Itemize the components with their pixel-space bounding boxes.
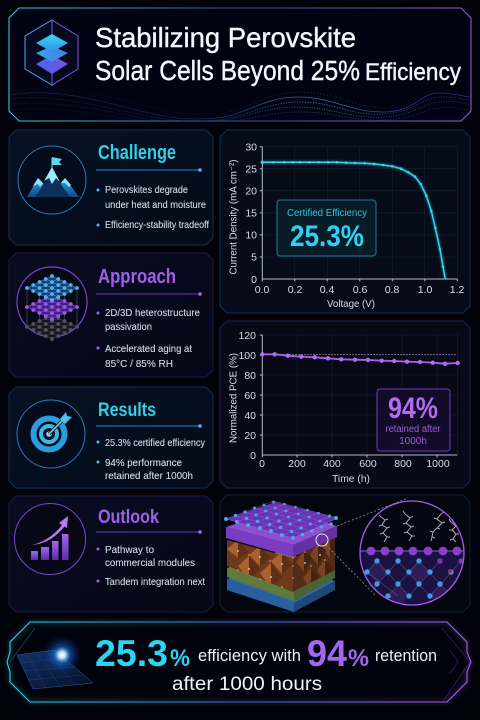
callout: retained: 1000h bbox=[399, 436, 427, 447]
organic ligand chains bbox=[379, 511, 459, 542]
bullets: 25.3% certified efficiency bbox=[105, 437, 206, 449]
title bbox=[95, 22, 461, 86]
axis labels: 80 bbox=[244, 370, 256, 382]
zoom marker and leader lines bbox=[316, 498, 408, 595]
blue substrate layer bbox=[227, 561, 335, 612]
top lattice layer bbox=[224, 501, 338, 540]
callout: certified efficiency: 25.3% bbox=[290, 220, 364, 253]
axis labels: 0.8 bbox=[385, 284, 399, 296]
title: Solar Cells Beyond 25% bbox=[95, 55, 360, 86]
icon: target with arrow bbox=[17, 400, 85, 468]
key takeaway text: efficiency with bbox=[198, 646, 301, 665]
axis labels: 15 bbox=[245, 208, 257, 220]
reference line at 100% bbox=[262, 354, 457, 356]
axis labels: 60 bbox=[244, 390, 256, 402]
footer banner bbox=[7, 622, 471, 703]
axis labels: 0 bbox=[250, 450, 256, 462]
axis labels: 0.6 bbox=[353, 284, 367, 296]
bullets bbox=[96, 437, 206, 482]
bullets bbox=[96, 544, 205, 588]
key takeaway text: 94 bbox=[307, 633, 347, 674]
header banner bbox=[9, 8, 471, 123]
plot grid bbox=[262, 335, 457, 455]
callout: certified efficiency: Certified Efficiency bbox=[287, 207, 368, 219]
axis labels: Current Density (mA cm⁻²) bbox=[228, 160, 240, 274]
axis labels: 1.0 bbox=[418, 284, 432, 296]
axis labels: 1000 bbox=[426, 458, 450, 470]
axis labels: 20 bbox=[244, 430, 256, 442]
panel: device structure bbox=[220, 495, 470, 612]
axis labels: 200 bbox=[288, 458, 306, 470]
purple slab bbox=[226, 510, 337, 557]
divider rule bbox=[96, 292, 202, 296]
axis labels: 120 bbox=[238, 330, 256, 342]
axis labels: 800 bbox=[394, 458, 412, 470]
icon: solar panel with sunburst bbox=[17, 635, 93, 689]
icon: mountain with flag bbox=[18, 146, 86, 214]
panel: J-V chart bbox=[220, 130, 470, 313]
axis labels: 25 bbox=[245, 164, 257, 176]
olive layer bbox=[227, 551, 335, 601]
divider rule bbox=[96, 530, 202, 534]
divider rule bbox=[96, 168, 202, 172]
bullets: Accelerated aging at bbox=[105, 343, 192, 355]
axis labels: 5 bbox=[251, 252, 257, 264]
key takeaway text: retention bbox=[375, 646, 437, 665]
bullets: retained after 1000h bbox=[105, 470, 193, 482]
bullets: commercial modules bbox=[105, 557, 195, 569]
heading: Results bbox=[98, 400, 156, 421]
axis labels: 400 bbox=[323, 458, 341, 470]
panel: retention chart bbox=[220, 321, 470, 488]
heading: Challenge bbox=[98, 142, 176, 164]
axis labels: Time (h) bbox=[332, 473, 370, 485]
icon: growth bars with arrow bbox=[14, 504, 86, 574]
panel: outlook bbox=[9, 496, 213, 612]
axis labels: 1.2 bbox=[450, 284, 464, 296]
bullets: Tandem integration next bbox=[105, 576, 205, 588]
bullets: under heat and moisture bbox=[105, 199, 206, 211]
axes bbox=[260, 147, 457, 282]
bullets: Efficiency-stability tradeoff bbox=[105, 219, 209, 231]
axis labels: 100 bbox=[238, 350, 256, 362]
key takeaway text: % bbox=[170, 645, 190, 672]
decorative dotted wave bbox=[10, 88, 470, 123]
perovskite layer bbox=[227, 536, 338, 592]
bullets: 85°C / 85% RH bbox=[105, 358, 173, 370]
bullets: 2D/3D heterostructure bbox=[105, 307, 200, 319]
axis labels: Normalized PCE (%) bbox=[228, 353, 240, 443]
callout: retained: retained after bbox=[386, 424, 441, 435]
axis labels: 0.4 bbox=[320, 284, 334, 296]
panel: results bbox=[9, 387, 213, 488]
axis labels: Voltage (V) bbox=[327, 298, 375, 310]
axes bbox=[260, 335, 457, 458]
title: Efficiency bbox=[365, 59, 461, 86]
axis labels: 40 bbox=[244, 410, 256, 422]
bullets: passivation bbox=[105, 321, 152, 333]
plot grid bbox=[262, 147, 457, 279]
magnified interface circle bbox=[360, 501, 465, 611]
heading: Approach bbox=[98, 266, 176, 288]
icon: stacked layers in hexagon bbox=[25, 20, 78, 85]
layer stack bbox=[224, 501, 338, 612]
axis labels: 600 bbox=[359, 458, 377, 470]
axis labels: 0 bbox=[259, 458, 265, 470]
bullets: Perovskites degrade bbox=[105, 184, 188, 196]
axis labels: 0 bbox=[251, 274, 257, 286]
key takeaway text bbox=[95, 633, 437, 695]
key takeaway text: 25.3 bbox=[95, 633, 168, 674]
axis labels bbox=[228, 330, 450, 485]
title: Stabilizing Perovskite bbox=[95, 22, 356, 53]
panel: challenge bbox=[9, 130, 213, 245]
bullets: Pathway to bbox=[105, 544, 154, 556]
callout: retained bbox=[377, 389, 450, 451]
divider rule bbox=[96, 424, 202, 428]
bullets bbox=[96, 307, 200, 370]
icon: lattice layers bbox=[17, 267, 87, 341]
key takeaway text: after 1000 hours bbox=[172, 674, 322, 695]
axis labels: 0.0 bbox=[255, 284, 269, 296]
bullets: 94% performance bbox=[105, 457, 182, 469]
axis labels: 30 bbox=[245, 142, 257, 154]
axis labels: 20 bbox=[245, 186, 257, 198]
callout: certified efficiency bbox=[277, 200, 376, 256]
key takeaway text: % bbox=[348, 645, 369, 672]
bullets bbox=[96, 184, 209, 231]
axis labels bbox=[228, 142, 464, 310]
J-V curve bbox=[261, 161, 445, 279]
callout: retained: 94% bbox=[388, 392, 438, 425]
axis labels: 10 bbox=[245, 230, 257, 242]
axis labels: 0.2 bbox=[288, 284, 302, 296]
decorative chevrons bbox=[10, 628, 470, 703]
panel: approach bbox=[9, 253, 213, 377]
retention curve bbox=[260, 352, 460, 366]
heading: Outlook bbox=[98, 507, 159, 528]
